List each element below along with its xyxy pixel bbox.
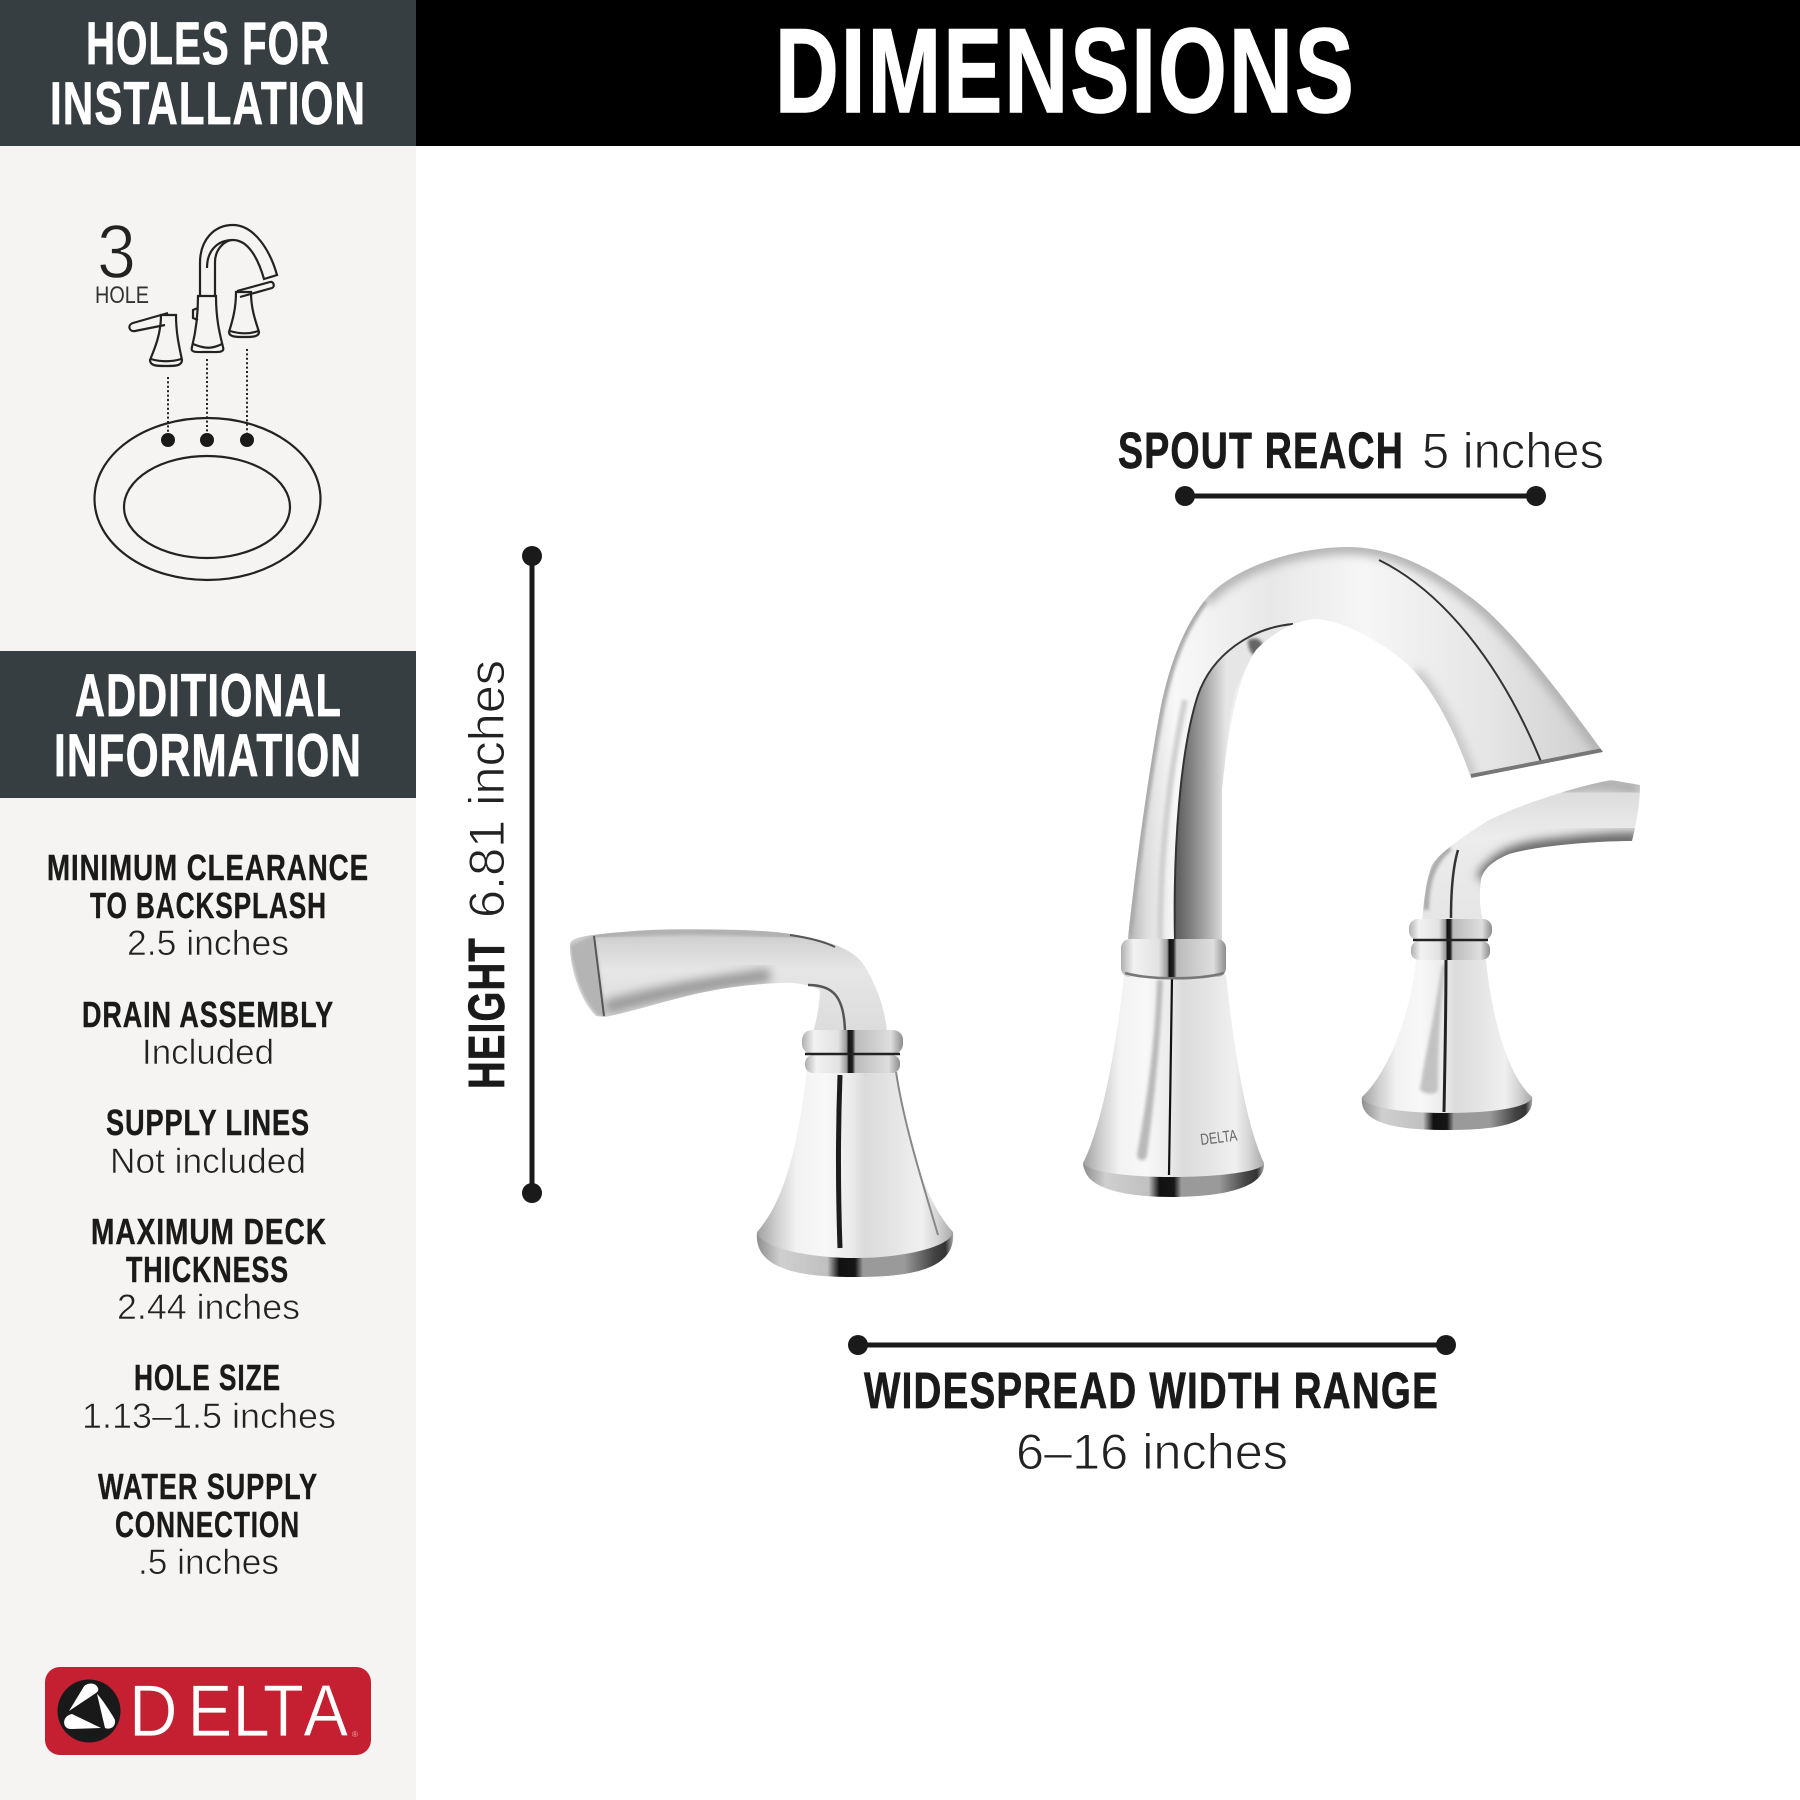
panel: sidebar — [0, 0, 416, 1800]
icon: three hole sink and faucet: 3 — [97, 210, 136, 295]
logo: delta: DELTA — [129, 1670, 348, 1752]
spec: minimum clearance to backsplash: TO BACKSPLASH — [90, 885, 327, 926]
spec: drain assembly: DRAIN ASSEMBLY — [82, 994, 334, 1035]
spec: supply lines: SUPPLY LINES — [106, 1102, 310, 1143]
dimension: height — [458, 546, 542, 1203]
faucet illustration — [570, 547, 1640, 1277]
heading: additional information — [0, 651, 416, 798]
spec: minimum clearance to backsplash — [47, 847, 369, 963]
dimension: widespread width range: 6–16 inches — [1016, 1424, 1288, 1480]
spec: hole size — [82, 1357, 336, 1436]
spec: maximum deck thickness: THICKNESS — [126, 1249, 289, 1290]
spec: drain assembly — [82, 994, 334, 1072]
spec: water supply connection: WATER SUPPLY — [98, 1466, 318, 1507]
logo: delta — [45, 1667, 371, 1755]
title bar — [416, 0, 1800, 146]
dimension: widespread width range — [848, 1335, 1456, 1480]
dimension: widespread width range: WIDESPREAD WIDTH RANGE — [864, 1362, 1439, 1419]
dimension: spout reach: SPOUT REACH — [1118, 422, 1404, 479]
dimension: spout reach: 5 inches — [1422, 423, 1604, 479]
faucet: spout base: DELTA — [1199, 1128, 1238, 1149]
spec: maximum deck thickness — [91, 1211, 327, 1327]
faucet: right handle — [1362, 780, 1640, 1130]
spec: supply lines: Not included — [110, 1142, 306, 1181]
spec: water supply connection: CONNECTION — [115, 1504, 300, 1545]
icon: three hole sink and faucet: HOLE — [95, 282, 149, 309]
faucet: spout base — [1083, 939, 1264, 1197]
spec: maximum deck thickness: 2.44 inches — [117, 1288, 300, 1327]
faucet: left handle — [570, 929, 953, 1277]
heading: additional information: ADDITIONAL — [75, 662, 342, 729]
spec: drain assembly: Included — [142, 1033, 274, 1072]
faucet: main spout — [1128, 547, 1603, 941]
title bar: DIMENSIONS — [775, 4, 1356, 138]
heading: holes for installation: INSTALLATION — [50, 70, 366, 137]
spec: hole size: HOLE SIZE — [134, 1357, 281, 1398]
heading: holes for installation — [0, 0, 416, 146]
dimension: height: HEIGHT — [458, 937, 515, 1089]
heading: additional information: INFORMATION — [54, 722, 362, 789]
spec: water supply connection: .5 inches — [138, 1543, 279, 1582]
spec: hole size: 1.13–1.5 inches — [82, 1397, 336, 1436]
dimension: height: 6.81 inches — [459, 660, 515, 918]
spec: minimum clearance to backsplash: 2.5 inches — [127, 924, 289, 963]
heading: holes for installation: HOLES FOR — [86, 10, 330, 77]
sidebar background — [0, 0, 416, 1800]
spec: maximum deck thickness: MAXIMUM DECK — [91, 1211, 327, 1252]
logo: delta: ® — [352, 1730, 358, 1739]
spec: minimum clearance to backsplash: MINIMUM CLEARANCE — [47, 847, 369, 888]
icon: three hole sink and faucet — [94, 210, 320, 580]
spec: water supply connection — [98, 1466, 318, 1582]
dimension: spout reach — [1118, 422, 1604, 506]
spec: supply lines — [106, 1102, 310, 1181]
